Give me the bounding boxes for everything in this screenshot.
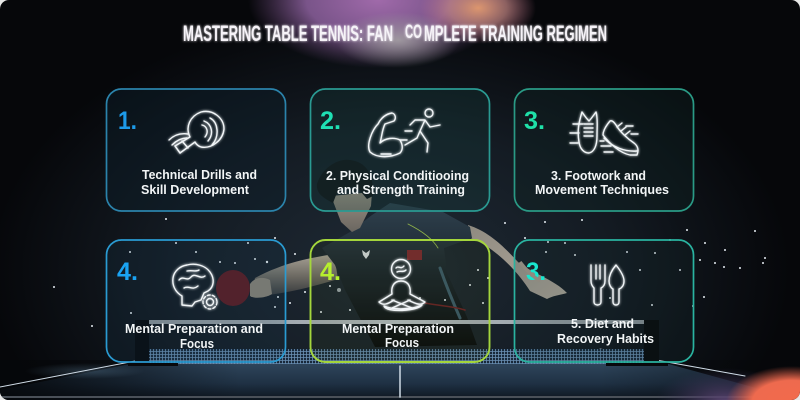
- number 3: 3.: [524, 107, 545, 135]
- icon: flexed arm and runner: [369, 109, 440, 157]
- icon: fork and spoon: [591, 265, 624, 305]
- shirt accents: [408, 224, 465, 318]
- card 4 label: Focus: [180, 337, 214, 351]
- card 2 label: 2. Physical Conditiooing: [326, 169, 469, 183]
- card 1 label: [141, 168, 257, 197]
- shirt flag: [407, 250, 422, 260]
- card 6 label: 5. Diet and: [571, 317, 634, 331]
- number 3 cyan on wrist: 3.: [526, 258, 546, 286]
- card 3 label: 3. Footwork and: [551, 169, 646, 183]
- table bottom edge: [0, 396, 800, 398]
- card 5: mental preparation lime: [310, 240, 490, 362]
- card 5 label: Mental Preparation: [342, 322, 454, 336]
- shirt logo: [362, 250, 370, 259]
- player right arm: [468, 225, 567, 299]
- bottom right coral glow: [664, 366, 800, 400]
- icon: brain and gear: [173, 264, 217, 309]
- player left arm: [254, 255, 338, 294]
- table side shading: [0, 360, 800, 400]
- icon: running shoes: [570, 112, 638, 155]
- number 4 lime: 4.: [320, 258, 341, 286]
- card 2: physical conditioning: [310, 89, 490, 211]
- card 2 label: and Strength Training: [337, 183, 465, 197]
- player torso: [322, 203, 477, 347]
- player: [250, 160, 567, 347]
- wrist overlapping number: [520, 262, 540, 281]
- title part one: MASTERING TABLE TENNIS: FAN: [183, 21, 393, 46]
- card 3: footwork: [514, 89, 694, 211]
- card 4 label: Mental Preparation and: [125, 322, 263, 336]
- card 4: mental preparation blue: [106, 240, 286, 362]
- net posts: [128, 320, 668, 366]
- card 6 label: Recovery Habits: [557, 332, 654, 346]
- card 3 label: Movement Techniques: [535, 183, 669, 197]
- card 6 label: [557, 317, 654, 346]
- icon: meditating figure: [379, 260, 425, 310]
- card 1 label: Technical Drills and: [142, 168, 257, 182]
- title part three: MPLETE TRAINING REGIMEN: [424, 21, 607, 46]
- particles: [53, 218, 766, 327]
- player head: [331, 192, 372, 232]
- icon: paddle: [169, 111, 224, 153]
- title part two: CO: [405, 22, 422, 43]
- table edge lines: [0, 349, 745, 397]
- number 4 blue: 4.: [117, 258, 138, 286]
- card 5 label: Focus: [385, 336, 419, 350]
- card 1: technical drills: [106, 89, 286, 211]
- card 6: diet and recovery: [514, 240, 694, 362]
- net top bar: [148, 320, 652, 324]
- table edge glow: [36, 364, 132, 378]
- top purple and orange glow: [252, 0, 534, 66]
- hand on paddle: [250, 278, 272, 298]
- net mesh: [148, 349, 652, 364]
- number 1: 1.: [118, 107, 137, 135]
- number 2: 2.: [320, 107, 341, 135]
- paddle: [216, 270, 250, 306]
- card 4 label: [125, 322, 263, 351]
- card 5 label: [342, 322, 454, 350]
- player hair: [317, 160, 373, 203]
- card 3 label: [535, 169, 669, 197]
- card 1 label: Skill Development: [141, 183, 250, 197]
- table surface: [0, 363, 800, 400]
- card 2 label: [326, 169, 469, 197]
- title: [182, 23, 608, 43]
